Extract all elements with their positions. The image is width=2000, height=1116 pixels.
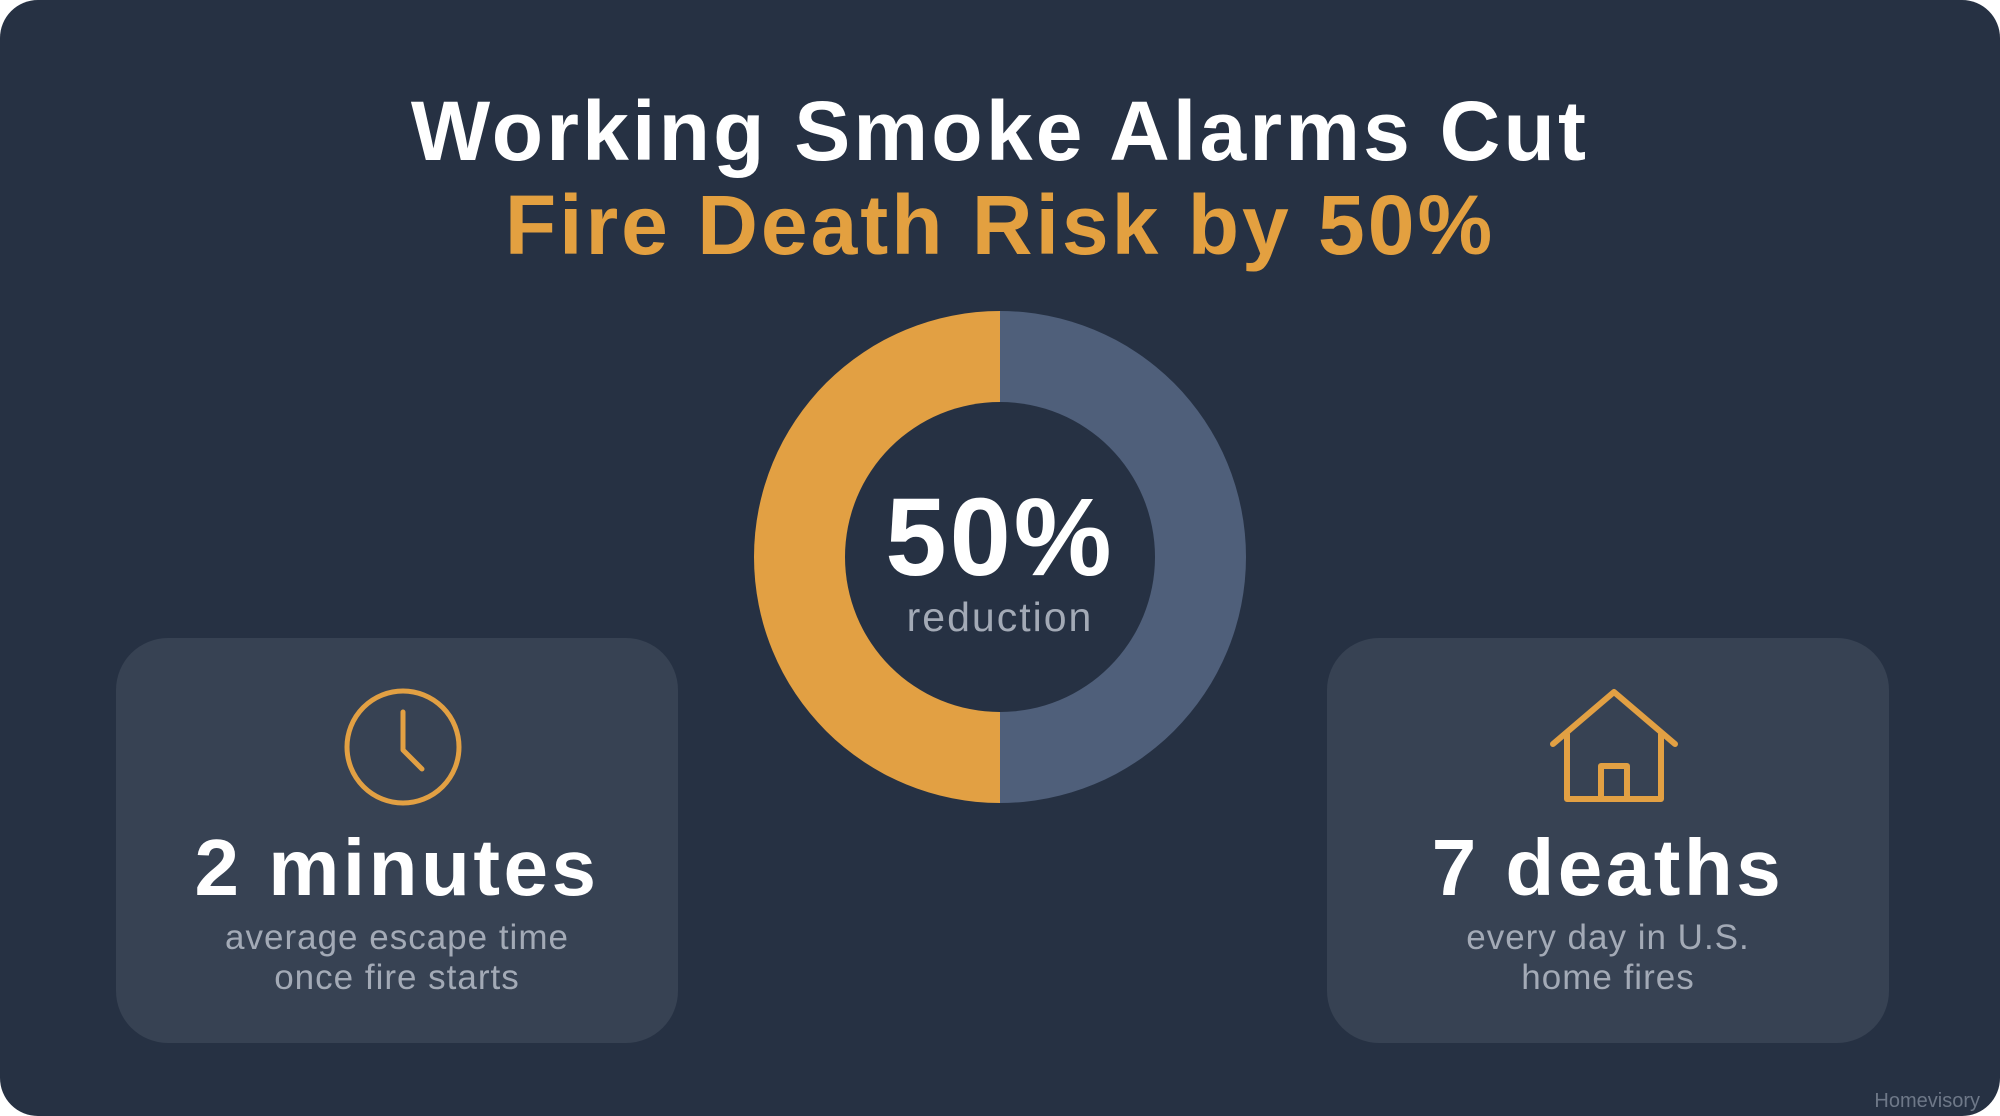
icon: house <box>1550 688 1678 802</box>
panel: deaths <box>1327 638 1889 1043</box>
stat: 7 deaths: 7 deaths <box>1432 823 1784 912</box>
donut center label: reduction <box>907 594 1093 640</box>
title: Fire Death Risk by 50% <box>505 178 1495 272</box>
stat: 2 minutes: 2 minutes <box>195 823 599 912</box>
title: Working Smoke Alarms Cut <box>411 84 1589 178</box>
title <box>411 84 1589 272</box>
caption: average escape time <box>225 918 569 957</box>
caption: home fires <box>1521 958 1695 997</box>
caption <box>225 918 569 997</box>
panel: escape time <box>116 638 678 1043</box>
caption <box>1466 918 1750 997</box>
donut center label: 50% <box>885 476 1115 599</box>
caption: every day in U.S. <box>1466 918 1750 957</box>
watermark: Homevisory <box>1874 1090 1980 1112</box>
donut chart <box>754 311 1246 803</box>
icon: clock <box>344 688 462 806</box>
caption: once fire starts <box>274 958 520 997</box>
